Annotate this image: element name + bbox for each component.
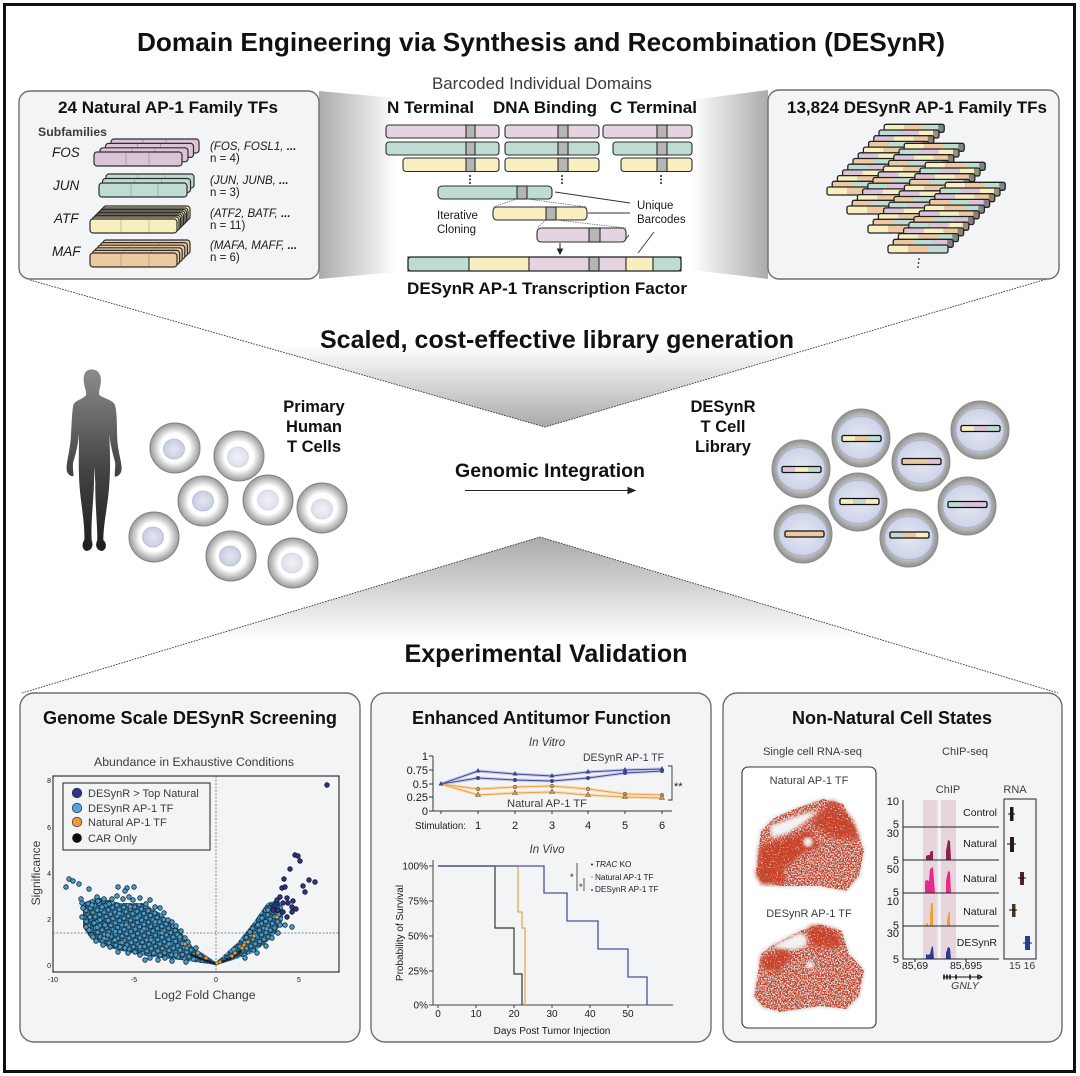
line chart: in vitro: 0.25 (407, 792, 428, 804)
label: DESynR TF: DESynR AP-1 Transcription Factor (407, 279, 687, 298)
axes ticks: 0 (214, 977, 218, 984)
MAF stack: n = 6) (210, 252, 240, 264)
heading: screening: Genome Scale DESynR Screening (43, 708, 337, 728)
ChIP tracks: ChIP (936, 784, 960, 796)
series lines (441, 769, 662, 798)
label: scRNA-seq: Single cell RNA-seq (763, 746, 862, 758)
survival chart (395, 860, 673, 1037)
significance bracket (668, 766, 683, 800)
track peaks (926, 840, 951, 860)
ChIP tracks: 30 (887, 928, 899, 940)
survival chart: 50 (622, 1009, 634, 1020)
label: unique barcodes: Unique (637, 200, 673, 212)
top natural outliers (271, 783, 329, 919)
heading: cell states: Non-Natural Cell States (792, 708, 992, 728)
MAF stack (52, 240, 297, 267)
panel: natural TFs (19, 91, 319, 279)
heading: DESynR TFs: 13,824 DESynR AP-1 Family TFs (787, 98, 1047, 117)
cloning guide lines (493, 199, 626, 228)
legend: DESynR > Top Natural (88, 788, 199, 800)
survival chart: 75% (408, 896, 428, 908)
line chart: in vitro: 3 (549, 820, 555, 832)
series labels: DESynR AP-1 TF (583, 752, 664, 764)
legend: CAR Only (88, 833, 137, 845)
label: DESynR UMAP: DESynR AP-1 TF (766, 908, 852, 920)
series markers (438, 766, 664, 786)
library stacks (827, 124, 1005, 253)
GNLY gene (943, 974, 982, 992)
label: subfamilies: Subfamilies (38, 125, 107, 139)
ChIP tracks: Natural (963, 873, 997, 885)
line chart: in vitro: 5 (622, 820, 628, 832)
title: Domain Engineering via Synthesis and Recombination (DESynR) (137, 27, 945, 57)
arrow: integration (465, 488, 635, 494)
curve: TRAC KO (438, 866, 522, 1005)
ATF stack: ATF (53, 211, 79, 226)
DESynR outliers (64, 877, 294, 964)
series halos (441, 769, 662, 798)
natural TF points (183, 915, 279, 965)
line chart: in vitro: 1 (475, 820, 481, 832)
MAF stack: (MAFA, MAFF, ... (210, 240, 297, 252)
primary T cells (129, 423, 347, 588)
line chart: in vitro: 0.5 (413, 779, 428, 791)
ChIP tracks: Natural (963, 906, 997, 918)
survival chart: 20 (508, 1009, 520, 1020)
survival legend (570, 860, 659, 894)
ellipses (469, 175, 662, 184)
line chart: in vitro: 1 (422, 751, 428, 763)
final TF bar (408, 257, 681, 271)
volcano plot (29, 776, 339, 1002)
survival chart: 30 (546, 1009, 558, 1020)
axes ticks: -10 (48, 977, 58, 984)
UMAP: natural (755, 798, 865, 892)
track axes (903, 800, 999, 962)
domain bars (386, 125, 692, 172)
curve: DESynR (438, 866, 647, 1005)
column headings: DNA Binding (493, 98, 597, 117)
label: in vivo: In Vivo (530, 844, 565, 856)
label: iterative cloning: Iterative (437, 210, 478, 222)
axes ticks: 8 (47, 778, 51, 785)
label: iterative cloning (437, 210, 478, 236)
survival chart: 0 (435, 1009, 441, 1020)
axis label: survival: Probability of Survival (395, 885, 406, 981)
line chart: in vitro: 6 (659, 820, 665, 832)
dense centre band (190, 950, 242, 964)
label: unique barcodes (637, 200, 686, 226)
barcode leader lines (555, 192, 654, 253)
heading: library generation: Scaled, cost-effective library generation (320, 326, 794, 354)
JUN stack: (JUN, JUNB, ... (210, 175, 289, 187)
panel: DESynR TFs (768, 90, 1059, 279)
survival chart: 25% (408, 966, 428, 978)
ellipsis (917, 258, 920, 268)
ChIP tracks: 5 (893, 954, 899, 966)
chart title: Abundance in Exhaustive Conditions (94, 755, 294, 769)
line chart: in vitro: 4 (585, 820, 591, 832)
survival legend: DESynR AP-1 TF (595, 885, 659, 894)
panel: cell states (723, 693, 1062, 1042)
label: primary T cells: Human (286, 418, 342, 436)
curve: natural (438, 866, 525, 1005)
DESynR T cells (772, 401, 1009, 567)
survival chart: 0% (414, 1000, 428, 1012)
label: primary T cells: Primary (283, 398, 346, 416)
legend: Natural AP-1 TF (88, 817, 167, 829)
column headings: C Terminal (610, 98, 697, 117)
ATF stack (53, 206, 291, 233)
icon: human silhouette (67, 369, 122, 551)
label: primary T cells: T Cells (287, 438, 341, 456)
JUN stack: n = 3) (210, 187, 240, 199)
line chart: in vitro: 0.75 (407, 765, 428, 777)
ChIP tracks: DESynR (957, 937, 997, 949)
survival chart: 100% (402, 862, 428, 872)
MAF stack: MAF (52, 244, 81, 259)
label: iterative cloning: Cloning (437, 224, 476, 236)
series labels: Natural AP-1 TF (507, 798, 587, 810)
survival chart: 50% (408, 932, 428, 942)
RNA strip: RNA (1003, 784, 1027, 796)
right scatter cloud (216, 900, 283, 965)
axes ticks: 0 (47, 963, 51, 970)
ChIP tracks: 5 (893, 887, 899, 899)
survival legend: * (570, 872, 574, 883)
side funnel left (319, 91, 396, 279)
axes ticks: 4 (47, 871, 51, 878)
significance bracket: ** (674, 781, 683, 793)
ChIP tracks: 5 (893, 855, 899, 867)
heading: natural TFs: 24 Natural AP-1 Family TFs (58, 98, 278, 117)
RNA strip: 15 16 (1009, 960, 1035, 972)
ATF stack: n = 11) (210, 220, 245, 232)
JUN stack (52, 174, 289, 199)
label: primary T cells (283, 398, 346, 456)
label: ChIP-seq: ChIP-seq (942, 746, 988, 758)
axes ticks (47, 778, 301, 984)
survival legend: Natural AP-1 TF (595, 873, 654, 882)
ChIP tracks: 30 (887, 828, 899, 840)
label: in vitro: In Vitro (529, 737, 566, 749)
legend (63, 783, 210, 850)
UMAP: DESynR (753, 923, 865, 1013)
line chart: in vitro: 2 (512, 820, 518, 832)
ChIP tracks: 50 (887, 864, 899, 876)
axes ticks: 5 (297, 977, 301, 984)
ChIP tracks: Control (963, 807, 997, 819)
line chart: in vitro (407, 751, 683, 832)
axes ticks: -5 (131, 977, 137, 984)
survival legend: * (579, 882, 583, 893)
column headings: N Terminal (387, 98, 474, 117)
left scatter cloud (83, 897, 216, 965)
ChIP tracks: 10 (887, 896, 899, 908)
arrow (558, 243, 562, 254)
survival legend: TRAC KO (595, 860, 631, 869)
FOS stack: n = 4) (210, 153, 240, 165)
ChIP tracks: Natural (963, 838, 997, 850)
RNA strip (1003, 784, 1036, 972)
label: T cell library (690, 398, 756, 456)
FOS stack: FOS (52, 145, 80, 160)
line chart: in vitro: 0 (422, 806, 428, 818)
survival chart: 10 (470, 1009, 482, 1020)
label: T cell library: T Cell (701, 418, 745, 436)
iterative cloning bars (438, 186, 626, 242)
line chart: in vitro: Stimulation: (415, 820, 466, 832)
UMAP box (742, 767, 876, 1028)
ChIP tracks: 5 (893, 920, 899, 932)
label: unique barcodes: Barcodes (637, 214, 686, 226)
highlight bands (923, 800, 956, 959)
FOS stack (52, 139, 296, 166)
label: genomic integration: Genomic Integration (455, 460, 645, 482)
heading: antitumor function: Enhanced Antitumor Function (412, 708, 671, 728)
label: natural UMAP: Natural AP-1 TF (770, 775, 849, 787)
funnel: library generation (30, 279, 1047, 427)
ChIP tracks: 5 (893, 819, 899, 831)
ChIP tracks (887, 784, 999, 972)
label: T cell library: Library (695, 438, 752, 456)
axis label: significance: Significance (29, 840, 43, 905)
FOS stack: (FOS, FOSL1, ... (210, 141, 296, 153)
ChIP tracks: 85,695 (950, 960, 982, 972)
side funnel right (692, 90, 768, 279)
axis label: fold change: Log2 Fold Change (154, 988, 256, 1002)
GNLY gene: GNLY (951, 980, 980, 992)
heading: barcoded domains: Barcoded Individual Domains (432, 75, 652, 93)
barcoded domains section (386, 75, 697, 298)
legend: DESynR AP-1 TF (88, 803, 174, 815)
ChIP tracks: 85,69 (902, 960, 928, 972)
ATF stack: (ATF2, BATF, ... (210, 208, 291, 220)
series labels (507, 752, 664, 810)
column headings (387, 98, 697, 117)
JUN stack: JUN (52, 178, 79, 193)
label: T cell library: DESynR (690, 398, 756, 416)
panel: antitumor function (371, 693, 711, 1042)
ChIP tracks: 10 (887, 796, 899, 808)
axis label: days: Days Post Tumor Injection (494, 1026, 610, 1037)
axes ticks: 6 (47, 825, 51, 832)
heading: experimental validation: Experimental Validation (404, 640, 688, 668)
axes ticks: 2 (47, 917, 51, 924)
panel: screening (20, 693, 360, 1042)
funnel: experimental validation (22, 537, 1058, 693)
survival chart: 40 (584, 1009, 596, 1020)
